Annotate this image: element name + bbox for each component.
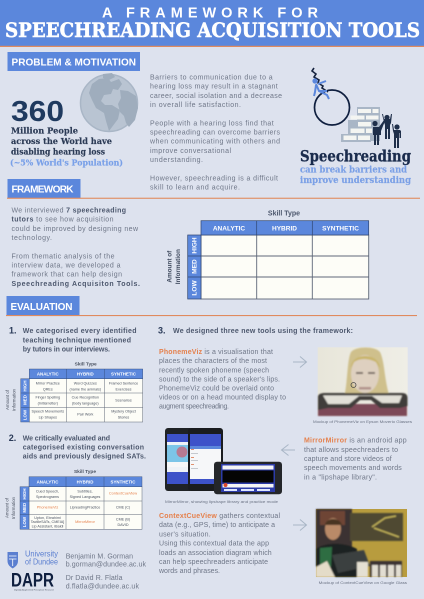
table: teaching techniques: (name the animals) xyxy=(70,388,101,392)
text block: barriers: in overall life satisfaction. xyxy=(150,102,241,109)
table: teaching techniques: Skill Type xyxy=(75,361,97,367)
table: existing aids and SATs: DAVID xyxy=(118,523,129,527)
table: existing aids and SATs: Amount of xyxy=(4,497,10,518)
table: existing aids and SATs: CME (B) xyxy=(116,518,130,522)
text block: author 2: Dr David R. Flatla xyxy=(66,575,123,582)
text block: interviews: tutors to see how acquisition xyxy=(12,217,114,224)
matrix axis label: Information xyxy=(175,249,182,284)
table: existing aids and SATs: HIGH xyxy=(22,489,27,499)
table: teaching techniques: Pair Work xyxy=(77,412,94,416)
phone: home screen xyxy=(165,428,193,491)
text block: ContextCueView: Using this contextual data the app xyxy=(159,541,269,548)
table: teaching techniques: MED xyxy=(23,395,28,405)
icon: globe xyxy=(80,73,138,132)
table: teaching techniques: QREs xyxy=(43,388,53,392)
table: teaching techniques: SYNTHETIC xyxy=(111,372,137,376)
text block: interviews: From thematic analysis of the xyxy=(12,253,115,260)
text block: author 2 xyxy=(66,575,140,590)
illustration: wrecking ball breaking a wall xyxy=(312,68,401,148)
matrix row headers: HIGH xyxy=(192,237,199,254)
table: existing aids and SATs: SYNTHETIC xyxy=(111,480,136,484)
table: existing aids and SATs: TactileSATs, CMEIA] xyxy=(31,520,64,524)
framework matrix: Skill Type xyxy=(268,210,300,217)
table: existing aids and SATs: PhonemeViz xyxy=(37,506,58,510)
text block: MirrorMirror: that allows speechreaders to xyxy=(304,447,398,454)
table: existing aids and SATs: CME (C) xyxy=(116,506,130,510)
photo: PhonemeViz mockup xyxy=(318,347,408,416)
table: teaching techniques: Speech Movements xyxy=(32,410,64,414)
logo: University of Dundee xyxy=(8,550,58,568)
table: teaching techniques: (Initial letter) xyxy=(38,402,58,406)
text block: interviews: could be improved by designing new xyxy=(12,226,139,233)
icon: person on ball xyxy=(312,78,329,99)
table: existing aids and SATs: MirrorMirror xyxy=(75,520,96,524)
matrix column headers: SYNTHETIC xyxy=(322,226,359,232)
text block: barriers: speechreading can overcome barriers xyxy=(150,130,280,136)
step 3 heading: We designed three new tools using the framework: xyxy=(173,328,353,335)
table: teaching techniques: LOW xyxy=(23,409,28,420)
section heading: problem and motivation xyxy=(8,52,140,71)
matrix row headers: MED xyxy=(192,259,199,274)
text block: PhonemeViz: PhonemeViz could be overlaid onto xyxy=(159,386,274,392)
callout: speechreading can break barriers xyxy=(300,147,412,186)
text block: PhonemeViz: PhonemeViz is a visualisation that xyxy=(159,349,273,356)
table: teaching techniques: (body language) xyxy=(72,402,99,406)
table: teaching techniques: Information xyxy=(12,388,16,411)
panel: problem and motivation xyxy=(8,52,412,192)
phone: practice mode xyxy=(214,462,282,494)
table: existing aids and SATs: LipreadingPractice xyxy=(70,506,100,510)
framework matrix xyxy=(166,210,369,299)
title line 1: A FRAMEWORK FOR xyxy=(102,6,319,22)
text block: MirrorMirror xyxy=(304,438,407,482)
matrix row headers: LOW xyxy=(192,280,199,296)
caption: ContextCueView: Mockup of ContextCueView on Google Glass xyxy=(319,580,407,585)
stat: 360 million: disabling hearing loss xyxy=(11,146,105,156)
illustration: MirrorMirror phones xyxy=(165,428,282,494)
icon: three people celebrating xyxy=(371,114,401,148)
table: existing aids and SATs: Information xyxy=(11,496,16,519)
callout: speechreading can break barriers: can break barriers and xyxy=(300,166,408,176)
table: existing aids and SATs: HYBRID xyxy=(77,480,93,484)
logo: DAPR: Digitally Augmented Perception Research xyxy=(14,588,54,592)
table: teaching techniques: Amount of xyxy=(5,389,10,410)
step 2 text xyxy=(9,433,146,461)
table: existing aids and SATs: ANALYTIC xyxy=(37,480,59,484)
text block: barriers: However, speechreading is a difficult xyxy=(150,176,278,183)
table: teaching techniques: Framed Sentence xyxy=(109,382,138,386)
table: existing aids and SATs: Upton, Ebrahimi xyxy=(34,516,61,520)
stat: 360 million: (~5% World's Population) xyxy=(10,158,123,168)
table: existing aids and SATs: Signed Languages xyxy=(70,495,101,499)
logo: University of Dundee: University xyxy=(25,550,58,559)
text block: ContextCueView: ContextCueView gathers contextual xyxy=(159,513,280,520)
table: teaching techniques: Scenarios xyxy=(115,398,132,402)
text block: barriers: improve conversational xyxy=(150,148,231,155)
step 1 text: 1. xyxy=(9,326,17,336)
table: teaching techniques: ANALYTIC xyxy=(37,372,60,376)
table: existing aids and SATs: Lip Assistant, iBaldi xyxy=(32,524,64,528)
panel: evaluation xyxy=(4,296,417,585)
caption: MirrorMirror: MirrorMirror, showing lipshape library and practice mode xyxy=(165,499,278,504)
text block: MirrorMirror: speech movements and words xyxy=(304,465,402,472)
table: existing aids and SATs: Spectrograms xyxy=(36,495,59,499)
stat: 360 million: 360 xyxy=(11,96,64,128)
text block: barriers: hearing loss may result in a stagnant xyxy=(150,84,278,91)
section heading: evaluation xyxy=(6,296,417,316)
table: teaching techniques: HYBRID xyxy=(77,372,94,376)
arrow: to ContextCueView photo xyxy=(293,520,306,530)
table: teaching techniques: HIGH xyxy=(23,381,28,391)
text block: barriers: Barriers to communication due to a xyxy=(150,74,273,82)
stat: 360 million: Million People xyxy=(11,125,78,135)
text block: ContextCueView: loads an association diagram which xyxy=(159,550,272,557)
text block: barriers: skill to learn and acquire. xyxy=(150,185,240,192)
text block: author 1 xyxy=(66,554,146,569)
step 2 text: We critically evaluated and xyxy=(23,436,110,443)
table: teaching techniques: Mirror Practice xyxy=(36,382,60,386)
text block: author 1: Benjamin M. Gorman xyxy=(66,554,133,561)
text block: barriers: understanding. xyxy=(150,157,203,164)
text block: barriers: career, social isolation and a decrease xyxy=(150,93,282,100)
text block: PhonemeViz: videos or on a head mounted display to xyxy=(159,395,286,402)
table: existing aids and SATs: Skill Type xyxy=(74,469,96,475)
text block: PhonemeViz: recently spoken phoneme (speech xyxy=(159,367,269,374)
section heading: problem and motivation: PROBLEM & MOTIVATION xyxy=(12,58,136,68)
text block: interviews: interview data, we developed a xyxy=(12,262,121,270)
step 1 text: by tutors in our interviews. xyxy=(23,347,110,354)
table: existing aids and SATs: ContextCueView xyxy=(109,492,137,496)
text block: PhonemeViz: sound) to the side of a speaker's lips. xyxy=(159,376,280,384)
table: teaching techniques: Word Quizzes xyxy=(74,382,97,386)
matrix row headers xyxy=(188,235,201,299)
callout: speechreading can break barriers: improve understanding xyxy=(300,176,412,186)
text block: MirrorMirror: capture and store videos of xyxy=(304,456,392,463)
arrow: to MirrorMirror phones xyxy=(282,444,295,456)
section heading: framework: FRAMEWORK xyxy=(12,184,74,195)
arrow: to PhonemeViz photo xyxy=(293,356,306,368)
phone: lipshape library xyxy=(188,428,223,491)
text block: ContextCueView: words and phrases. xyxy=(158,568,220,575)
table: existing aids and SATs: Subtitles, xyxy=(77,490,93,494)
text block: barriers xyxy=(149,74,282,192)
table: teaching techniques: Exercises xyxy=(116,388,132,392)
table: existing aids and SATs: MED xyxy=(22,503,27,513)
text block: barriers: when communicating with others and xyxy=(149,138,280,146)
text block: PhonemeViz: augment speechreading. xyxy=(159,404,229,410)
text block: ContextCueView xyxy=(158,513,280,575)
logo: University of Dundee: of Dundee xyxy=(25,557,58,566)
matrix axis label xyxy=(166,249,182,284)
matrix column headers: HYBRID xyxy=(272,226,297,232)
step 3 heading xyxy=(158,326,353,336)
text block: interviews: framework that can help design xyxy=(12,272,122,279)
table: existing aids and SATs: LOW xyxy=(22,516,27,527)
text block: PhonemeViz xyxy=(159,349,286,410)
text block: author 2: d.flatla@dundee.ac.uk xyxy=(66,583,140,590)
step 1 text: We categorised every identified xyxy=(23,328,137,335)
text block: ContextCueView: can help speechreaders anticipate xyxy=(159,559,268,566)
table: teaching techniques: Finger Spelling xyxy=(35,396,60,400)
panel: framework xyxy=(7,179,420,299)
text block: interviews: Speechreading Acquisiton Tools. xyxy=(12,281,140,288)
text block: MirrorMirror: MirrorMirror is an android app xyxy=(304,438,407,445)
table: teaching techniques: Lip Shapes xyxy=(39,416,57,420)
text block: PhonemeViz: places the characters of the most xyxy=(159,358,267,365)
text block: author 1: b.gorman@dundee.ac.uk xyxy=(66,562,146,569)
table: teaching techniques: Stories xyxy=(118,416,129,420)
photo: ContextCueView mockup xyxy=(316,509,407,577)
text block: MirrorMirror: in a "lipshape library". xyxy=(304,474,377,482)
table: teaching techniques xyxy=(5,361,143,422)
table: existing aids and SATs xyxy=(4,469,142,529)
step 2 text: categorised existing conversation xyxy=(23,444,144,451)
text block: interviews: technology. xyxy=(12,235,52,242)
text block: ContextCueView: data (e.g., GPS, time) to anticipate a xyxy=(159,522,275,529)
table: existing aids and SATs: Cued Speech, xyxy=(36,490,59,494)
title banner xyxy=(0,0,424,47)
table: teaching techniques: Mystery Object xyxy=(111,410,136,414)
step 2 text: aids and previously designed SATs. xyxy=(23,454,146,461)
step 1 text: teaching technique mentioned xyxy=(23,338,131,345)
caption: PhonemeViz: Mockup of PhonemeViz on Epson Moverio Glasses xyxy=(313,419,412,424)
section heading: evaluation: EVALUATION xyxy=(10,302,72,313)
step 2 text: 2. xyxy=(9,433,16,443)
text block: barriers: People with a hearing loss find that xyxy=(150,120,274,128)
logo: DAPR: DAPR xyxy=(11,571,54,592)
text block: interviews xyxy=(12,207,140,288)
section heading: framework xyxy=(7,179,420,199)
table: teaching techniques: Cue Recognition xyxy=(72,396,99,400)
icon: brick wall xyxy=(341,107,380,142)
stat: 360 million: across the World have xyxy=(11,136,112,146)
stat: 360 million xyxy=(10,96,123,168)
step 3 heading: 3. xyxy=(158,326,166,336)
text block: ContextCueView: user's situation. xyxy=(159,532,211,538)
matrix axis label: Amount of xyxy=(166,250,174,283)
matrix column headers xyxy=(201,221,369,235)
text block: interviews: We interviewed 7 speechreading xyxy=(12,207,126,214)
step 1 text xyxy=(9,326,136,354)
matrix column headers: ANALYTIC xyxy=(213,226,245,232)
